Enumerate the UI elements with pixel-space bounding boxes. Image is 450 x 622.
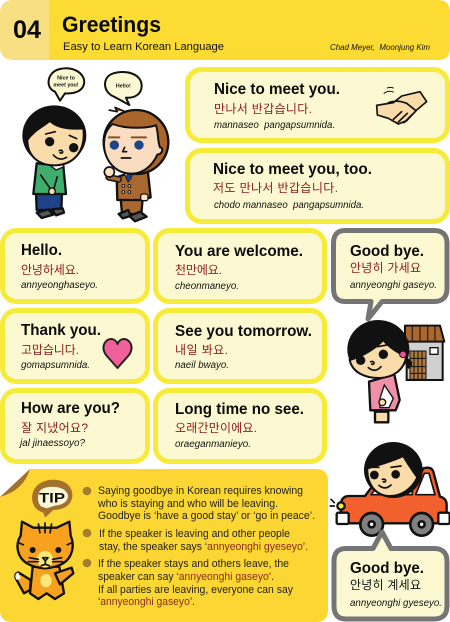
tip text 1: Saying goodbye in Korean requires knowing [98, 485, 303, 497]
speech card: good bye, annyeonghi gyeseyo [334, 532, 447, 619]
phrase card: nice to meet you [188, 70, 448, 140]
wheels [360, 513, 433, 536]
tip bubble [32, 480, 72, 518]
phrase card: thank you: Thank you. [21, 322, 101, 339]
driver [364, 442, 423, 498]
phrase card: long time no see: Long time no see. [175, 401, 304, 418]
authors: Chad Meyer, Moonjung Kim [330, 42, 430, 52]
tip text 3: If all parties are leaving, everyone can say [98, 584, 294, 596]
speech bubble: hello: Hello! [116, 84, 131, 90]
speech bubble: nice to meet you: Nice to [57, 75, 76, 81]
phrase card: see you tomorrow: 내일 봐요. [175, 343, 228, 357]
phrase card: how are you: 잘 지냈어요? [21, 421, 88, 435]
tip text 2: If the speaker is leaving and other people [99, 528, 290, 540]
illustration: man driving red car [330, 442, 450, 536]
illustration: two men greeting [22, 68, 168, 221]
phrase card: nice to meet you: 만나서 반갑습니다. [214, 102, 312, 116]
icon: heart [103, 339, 132, 368]
phrase card: thank you: 고맙습니다. [21, 343, 79, 357]
tip text 1 [97, 485, 315, 522]
speech card: good bye, annyeonghi gaseyo [334, 230, 447, 319]
phrase card: hello: Hello. [21, 242, 62, 259]
man bowing [22, 105, 86, 218]
phrase card: you are welcome: 천만에요. [175, 262, 222, 277]
tip bubble: TIP [39, 489, 65, 505]
title: Greetings [62, 12, 161, 37]
phrase card: long time no see [156, 390, 324, 462]
speech card: good bye, annyeonghi gaseyo: 안녕히 가세요 [350, 261, 421, 275]
woman [347, 320, 412, 422]
speech card: good bye, annyeonghi gaseyo: annyeonghi gaseyo. [350, 280, 437, 291]
tip text 3: ‘annyeonghi gaseyo’. [98, 596, 195, 608]
tip text 3: speaker can say ‘annyeonghi gaseyo’. [98, 571, 274, 583]
tip text 2: stay, the speaker says ‘annyeonghi gyeseyo’. [99, 541, 308, 553]
phrase card: how are you: How are you? [21, 400, 120, 417]
tip text 1: who is staying and who will be leaving. [97, 498, 278, 510]
phrase card: see you tomorrow: naeil bwayo. [175, 360, 229, 371]
subtitle: Easy to Learn Korean Language [63, 41, 224, 53]
speech bubble: nice to meet you [49, 68, 84, 101]
icon: handshake [377, 87, 427, 124]
lesson number: 04 [13, 16, 41, 44]
phrase card: nice to meet you too: Nice to meet you, too. [213, 161, 372, 178]
phrase card: thank you [2, 310, 148, 382]
folded corner [0, 469, 30, 497]
speech card: good bye, annyeonghi gyeseyo: annyeonghi gyeseyo. [350, 598, 442, 609]
speech card: good bye, annyeonghi gyeseyo: Good bye. [350, 560, 424, 577]
icon: tiger cat mascot [15, 522, 73, 599]
header banner [0, 0, 450, 60]
man in brown suit waving [104, 107, 168, 221]
car body [330, 468, 450, 524]
speech card: good bye, annyeonghi gaseyo: Good bye. [350, 243, 424, 260]
phrase card: nice to meet you too: 저도 만나서 반갑습니다. [213, 181, 338, 195]
phrase card: nice to meet you too [188, 150, 448, 222]
phrase card: hello: 안녕하세요. [21, 263, 79, 277]
speech card: good bye, annyeonghi gyeseyo: 안녕히 계세요 [350, 578, 421, 592]
phrase card: long time no see: 오래간만이에요. [175, 421, 257, 435]
tip text 3: If the speaker stays and others leave, the [98, 558, 289, 570]
phrase card: you are welcome: cheonmaneyo. [175, 281, 239, 292]
phrase card: see you tomorrow: See you tomorrow. [175, 323, 312, 340]
phrase card: how are you: jal jinaessoyo? [18, 438, 85, 449]
phrase card: hello [2, 230, 148, 302]
phrase card: see you tomorrow [156, 310, 324, 382]
phrase card: nice to meet you too: chodo mannaseo pangapsumnida. [214, 200, 364, 211]
tip text 3 [98, 558, 294, 608]
phrase card: you are welcome [156, 230, 324, 302]
phrase card: long time no see: oraeganmanieyo. [175, 439, 251, 450]
panel: tip [0, 469, 328, 622]
phrase card: nice to meet you: Nice to meet you. [214, 81, 340, 98]
phrase card: hello: annyeonghaseyo. [21, 280, 98, 291]
phrase card: how are you [2, 390, 148, 462]
tip text 1: Goodbye is ‘have a good stay’ or ‘go in peace’. [98, 510, 315, 522]
bullets [83, 487, 91, 567]
speech bubble: nice to meet you: meet you! [53, 82, 79, 88]
illustration: bowing woman and house [347, 320, 444, 422]
phrase card: nice to meet you: mannaseo pangapsumnida. [214, 120, 335, 131]
speech bubble: hello [105, 72, 142, 105]
phrase card: thank you: gomapsumnida. [21, 360, 90, 371]
house [405, 326, 444, 380]
phrase card: you are welcome: You are welcome. [175, 243, 303, 260]
tip text 2 [99, 528, 308, 553]
